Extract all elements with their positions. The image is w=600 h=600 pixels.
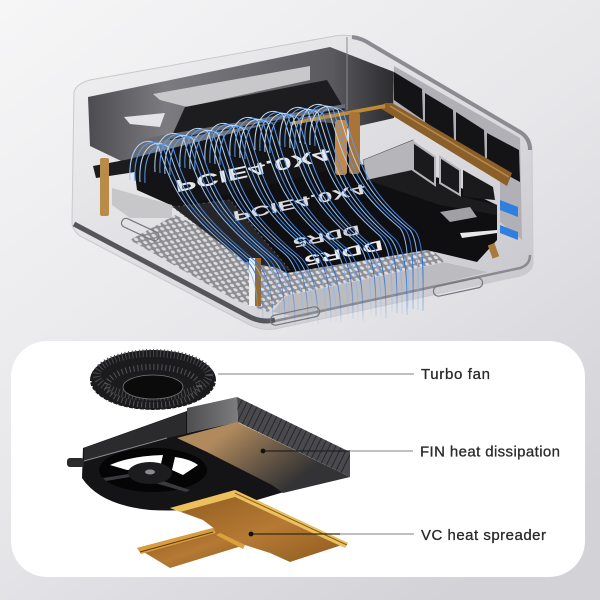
spreader gold rim	[170, 490, 348, 548]
panel: cooling components	[11, 341, 585, 577]
leader line: VC heat spreader	[249, 532, 414, 536]
right wall	[393, 66, 522, 240]
copper strip	[290, 104, 385, 125]
label: FIN heat dissipation: FIN heat dissipation	[420, 444, 560, 460]
vent panel 2	[425, 93, 454, 141]
fin top face	[187, 397, 238, 433]
card left tail	[93, 158, 135, 178]
tray rim right	[275, 255, 530, 321]
dark component cluster	[463, 170, 495, 200]
opening white left	[110, 455, 163, 470]
shell dark right edge	[352, 37, 530, 150]
transparent outer shell	[72, 35, 533, 330]
product: transparent mini PC cutaway	[72, 35, 533, 330]
fin ribs	[237, 409, 350, 465]
label: VC heat spreader: VC heat spreader	[421, 527, 546, 544]
dark area under ports	[367, 170, 497, 215]
label: Turbo fan: Turbo fan	[421, 366, 490, 383]
ethernet port 1	[413, 142, 435, 185]
back wall	[88, 47, 394, 170]
USB and small components	[440, 200, 518, 240]
PCIe label 2: PCIE4.0X4	[231, 181, 367, 225]
mounting lug	[67, 458, 84, 467]
card bright strip	[135, 104, 345, 145]
copper rail	[380, 103, 512, 186]
fin underside	[177, 422, 350, 493]
leader line: turbo fan	[218, 373, 414, 375]
PCIe label 1: PCIE4.0X4	[173, 144, 333, 196]
window in back wall	[153, 66, 310, 107]
shell vertical edge	[346, 37, 348, 110]
perforated floor	[130, 215, 445, 312]
spreader lower arm	[137, 528, 245, 568]
housing upper wall	[84, 412, 186, 461]
airflow lines	[130, 104, 423, 325]
main board	[173, 163, 497, 273]
icon: fin heat sink	[177, 397, 350, 493]
ethernet silver block	[363, 140, 413, 180]
dark inner band	[170, 80, 345, 140]
leader line: FIN heat dissipation	[261, 449, 413, 453]
fan hub and spokes	[103, 462, 190, 492]
vent panel 1	[394, 72, 423, 120]
DDR label 1: DDR5	[292, 222, 361, 251]
heat sink pins	[173, 200, 290, 270]
spreader main plate	[170, 490, 348, 562]
white panel background	[11, 341, 585, 577]
fan opening dark interior	[99, 448, 207, 492]
ethernet port 2	[440, 157, 460, 195]
airflow strand set: mid blue	[135, 105, 413, 323]
floor tiles	[272, 262, 490, 318]
airflow strand set: pale	[140, 106, 418, 324]
PCIe card	[133, 118, 352, 207]
DDR label 2: DDR5	[303, 237, 385, 269]
airflow strand set: light	[130, 104, 408, 322]
housing highlight	[84, 438, 167, 461]
vent panel 3	[456, 112, 485, 161]
opening white right	[172, 457, 198, 475]
brass standoffs	[100, 112, 499, 306]
icon: VC heat spreader	[137, 490, 348, 568]
floor tabs	[120, 217, 483, 326]
left connector	[112, 188, 172, 218]
icon: turbo fan	[90, 350, 216, 411]
copper rail highlight	[390, 106, 509, 177]
tray rim left	[74, 224, 275, 321]
icon: fan housing	[67, 411, 284, 510]
vent panel 4	[487, 133, 520, 182]
fin ribbed side	[237, 397, 350, 477]
light bracket	[124, 113, 165, 127]
airflow strand set: deep blue	[145, 107, 423, 325]
